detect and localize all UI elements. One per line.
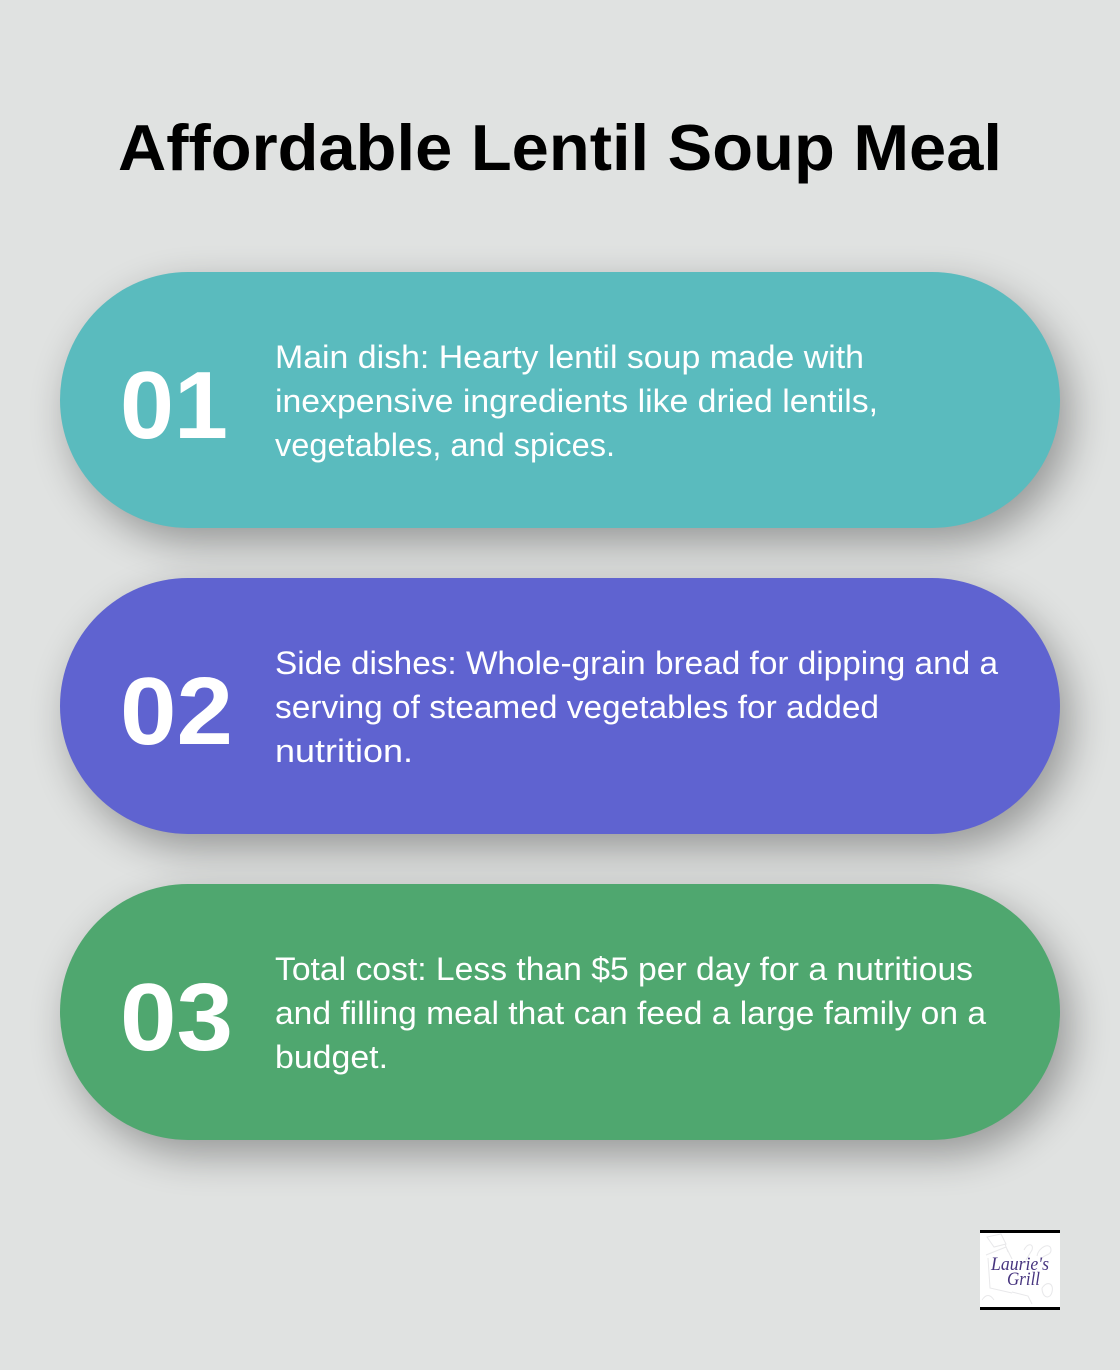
card 2 description: Side dishes: Whole-grain bread for dipping and a <box>275 645 998 681</box>
panel: card 2 background <box>60 578 1060 834</box>
panel: card 3 background <box>60 884 1060 1140</box>
card 2 description <box>275 645 998 769</box>
logo: Laurie's Grill: Grill <box>1007 1269 1040 1290</box>
card 3 description: Total cost: Less than $5 per day for a nutritious <box>275 951 973 987</box>
card 3 description <box>275 951 986 1075</box>
card 2 description: nutrition. <box>275 733 413 769</box>
number 03: 03 <box>120 964 233 1071</box>
card 3 content <box>120 951 986 1075</box>
logo: Laurie's Grill: Laurie's <box>990 1254 1049 1275</box>
card 2 description: serving of steamed vegetables for added <box>275 689 879 725</box>
card 2 content <box>120 645 998 769</box>
logo: Laurie's Grill <box>980 1230 1060 1310</box>
card 1 description <box>275 339 878 463</box>
card 1 description: vegetables, and spices. <box>275 427 615 463</box>
number 01: 01 <box>120 352 228 459</box>
card 1 description: inexpensive ingredients like dried lentils, <box>275 383 878 419</box>
card 3 description: budget. <box>275 1039 388 1075</box>
title: Affordable Lentil Soup Meal <box>118 111 1002 184</box>
panel: card 1 background <box>60 272 1060 528</box>
card 3 description: and filling meal that can feed a large family on a <box>275 995 986 1031</box>
card 1 content <box>120 339 878 463</box>
number 02: 02 <box>120 658 233 765</box>
card 1 description: Main dish: Hearty lentil soup made with <box>275 339 864 375</box>
